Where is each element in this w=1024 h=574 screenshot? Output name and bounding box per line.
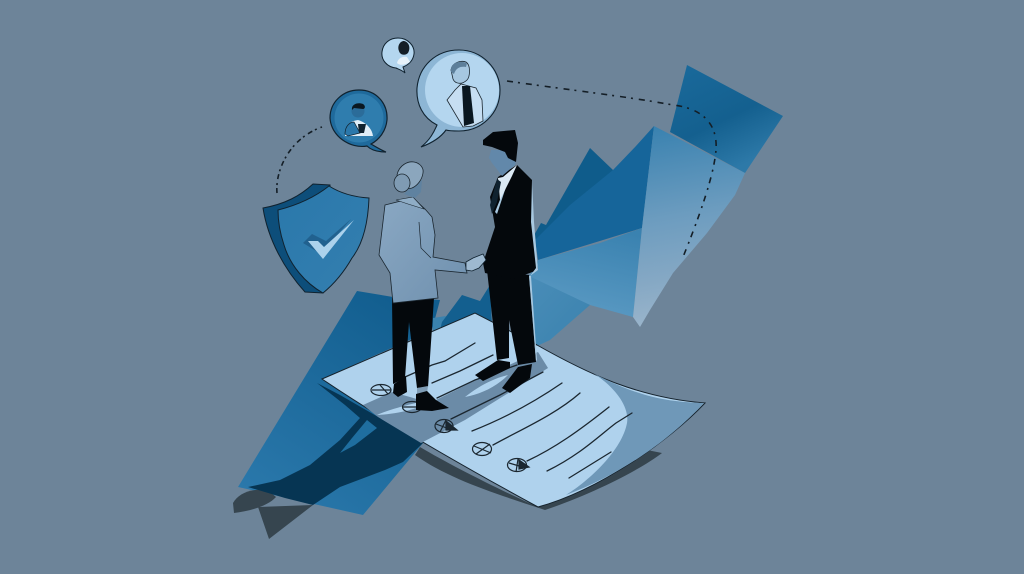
check shadow — [303, 219, 351, 254]
speech bubble: blue colleague — [330, 90, 387, 152]
small peak — [533, 148, 613, 252]
lower light face — [528, 228, 642, 317]
paper body — [322, 313, 705, 507]
light sliver in shadow — [465, 375, 508, 397]
back folded panel — [670, 65, 783, 173]
dashed path: bubble to chart — [507, 81, 716, 257]
left blue sheet — [238, 285, 492, 515]
face — [489, 150, 516, 176]
bubble inner — [425, 53, 499, 127]
ground shadows — [233, 447, 662, 539]
right shoe — [502, 364, 532, 393]
speech bubble: small portrait — [382, 38, 414, 73]
suit jacket — [483, 165, 538, 279]
doctor portrait — [447, 61, 483, 127]
shaking hands — [466, 254, 486, 271]
blue peak behind legs — [440, 285, 492, 330]
figure: woman from behind — [379, 162, 467, 411]
bottom left face — [526, 275, 590, 346]
neck shade — [404, 180, 422, 198]
blue sliver between legs — [433, 316, 446, 332]
shield side — [263, 184, 330, 293]
light sliver left — [377, 398, 437, 415]
person shadow cast on sheet — [248, 383, 423, 505]
bubble inner — [334, 94, 384, 142]
right gradient face — [633, 126, 745, 327]
hair — [483, 130, 518, 162]
left shoe — [475, 360, 510, 381]
shadow under sheet: left blob — [233, 490, 276, 513]
left shoe — [393, 376, 407, 397]
sock — [417, 386, 428, 394]
bubble body — [382, 38, 414, 73]
checklist text lines — [405, 343, 632, 478]
trousers — [487, 270, 536, 365]
collar — [396, 197, 424, 209]
check mark — [308, 220, 354, 259]
main dark face — [535, 126, 654, 260]
figure: man in dark suit — [466, 130, 538, 393]
right shoe — [416, 391, 449, 411]
head hair — [397, 162, 423, 188]
jacket — [379, 198, 467, 303]
trouser highlight — [529, 276, 537, 361]
shadow under sheet: triangle — [258, 505, 313, 539]
person — [397, 41, 410, 65]
people shadow on paper — [363, 352, 548, 443]
curled corner shade — [566, 373, 704, 495]
speech bubble: large doctor portrait — [417, 50, 500, 147]
light gap in cast shadow — [340, 420, 377, 453]
tie — [490, 179, 501, 214]
dashed path: shield to bubble — [277, 127, 322, 193]
person — [345, 103, 373, 136]
chart: folded rising mountain shape — [526, 65, 783, 346]
shirt collar — [498, 165, 517, 200]
hair bun — [394, 174, 410, 192]
sleeve line — [419, 222, 431, 258]
paper checklist document — [322, 313, 705, 507]
icon: security shield with check — [263, 184, 369, 293]
shadow under paper — [415, 447, 662, 510]
bubble rim — [417, 50, 500, 147]
bubble body — [330, 90, 387, 152]
suit highlights — [495, 175, 538, 276]
shield front — [278, 186, 369, 293]
checkbox circles — [371, 384, 529, 472]
trousers — [392, 298, 434, 388]
